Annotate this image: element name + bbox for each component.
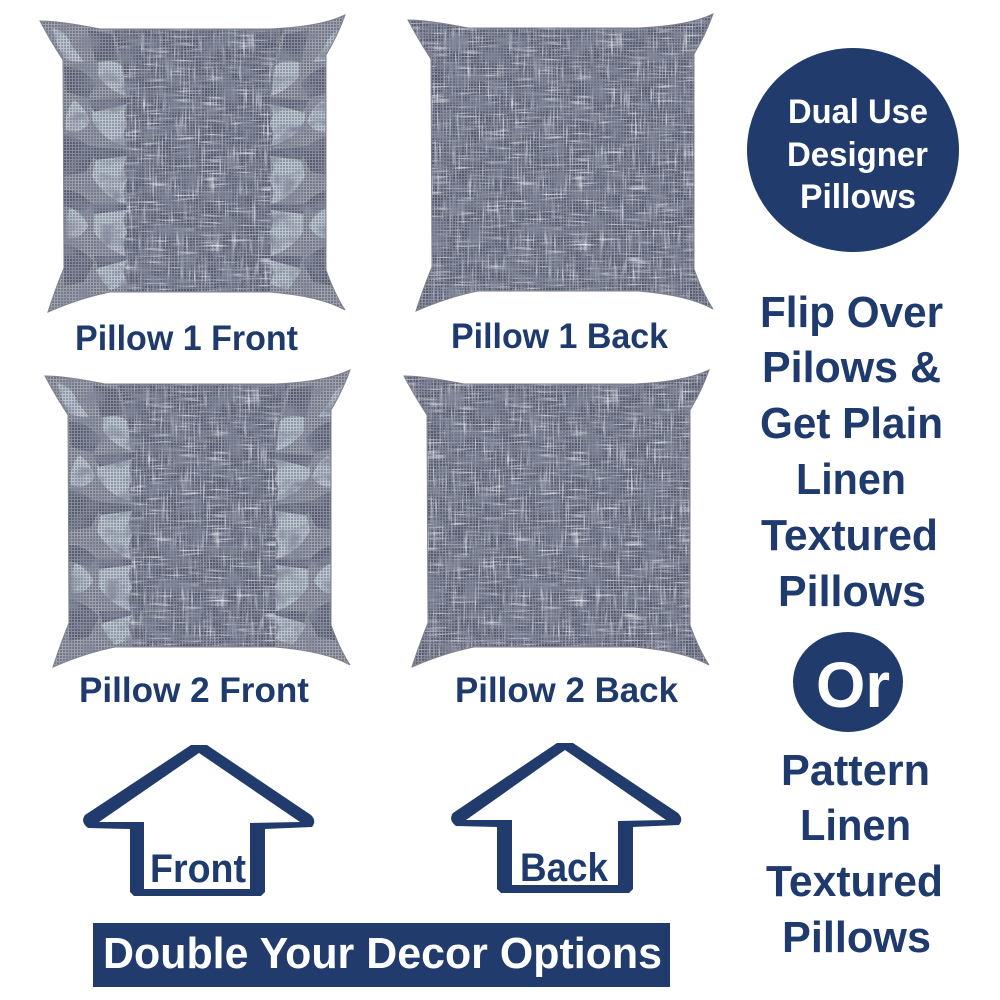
text block: flip over: Linen xyxy=(796,455,906,504)
text block: pattern linen: Textured xyxy=(766,857,943,906)
text block: flip over: Pillows xyxy=(778,567,926,616)
banner: double your decor options: Double Your Decor Options xyxy=(103,929,662,978)
label: pillow 2 front: Pillow 2 Front xyxy=(79,671,309,710)
text block: pattern linen: Linen xyxy=(800,801,911,850)
pillow 1 front xyxy=(39,14,346,313)
label: pillow 2 back: Pillow 2 Back xyxy=(455,671,679,710)
text block: flip over xyxy=(760,288,943,616)
text block: flip over: Get Plain xyxy=(760,399,943,448)
text block: flip over: Pilows & xyxy=(762,343,941,392)
text block: flip over: Flip Over xyxy=(760,288,943,337)
arrow: back xyxy=(451,743,681,893)
pillow 2 front xyxy=(44,369,351,668)
text block: pattern linen: Pattern xyxy=(781,746,930,795)
pillow 2 back xyxy=(399,365,714,670)
badge: dual use designer pillows: Designer xyxy=(787,136,928,174)
badge: or: Or xyxy=(816,649,890,721)
text block: pattern linen xyxy=(766,746,943,962)
pillow 1 back xyxy=(403,9,718,314)
badge: dual use designer pillows xyxy=(747,48,959,252)
badge: or xyxy=(793,632,903,732)
arrow: front xyxy=(83,745,314,896)
label: pillow 1 front: Pillow 1 Front xyxy=(75,319,298,358)
text block: flip over: Textured xyxy=(761,511,938,560)
badge: dual use designer pillows: Pillows xyxy=(800,178,916,216)
badge: dual use designer pillows: Dual Use xyxy=(788,93,928,131)
text block: pattern linen: Pillows xyxy=(782,913,931,962)
arrow: back: Back xyxy=(520,846,609,890)
label: pillow 1 back: Pillow 1 Back xyxy=(451,317,669,356)
arrow: front: Front xyxy=(150,847,246,891)
